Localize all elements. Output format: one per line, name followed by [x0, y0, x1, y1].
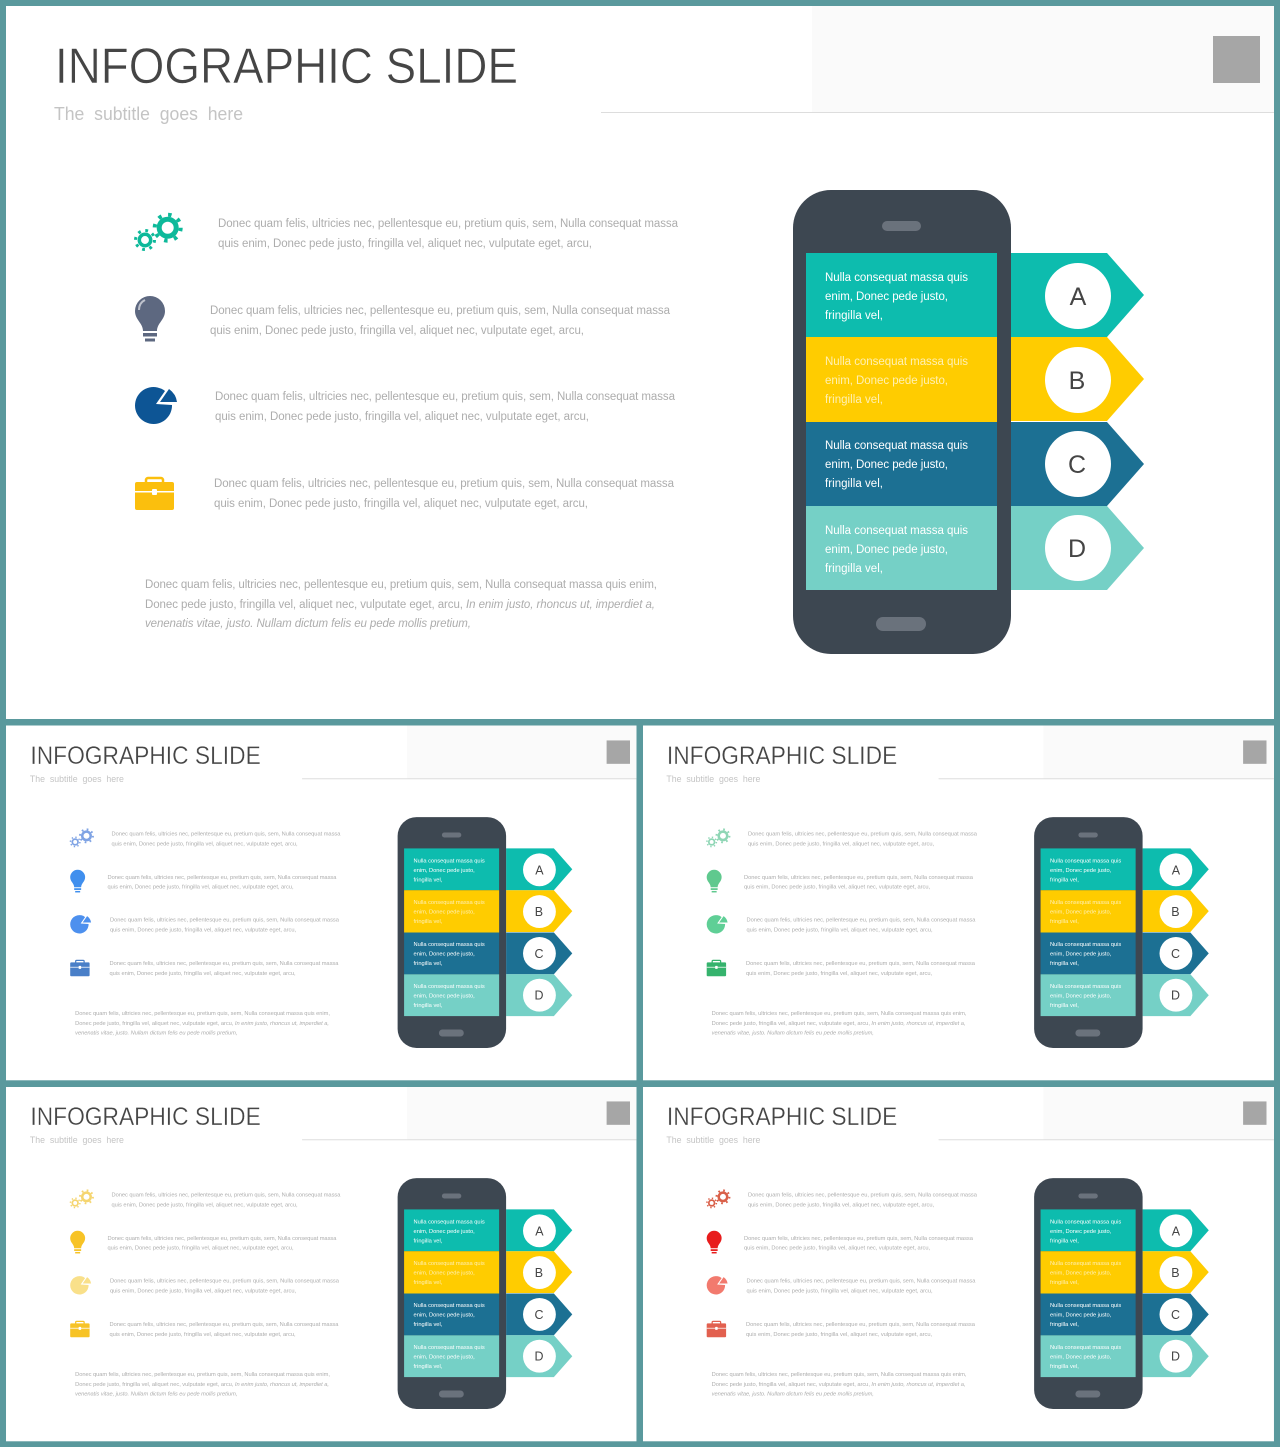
screen block B: fringilla vel,	[414, 919, 443, 925]
arrow tab: B: B	[1069, 367, 1085, 395]
screen block D: enim, Donec pede justo,	[414, 994, 475, 1000]
text: item 3	[747, 918, 976, 934]
arrow tab: C	[1011, 422, 1144, 506]
screen block C	[806, 422, 997, 506]
logo placeholder	[607, 1101, 630, 1125]
screen block C: enim, Donec pede justo,	[1050, 1312, 1112, 1318]
screen block D: Nulla consequat massa quis	[1050, 984, 1121, 990]
screen block A: Nulla consequat massa quis	[1050, 858, 1121, 864]
screen block C: fringilla vel,	[1050, 1322, 1079, 1328]
icon: briefcase	[707, 960, 726, 976]
text: paragraph: Donec pede justo, fringilla vel, aliquet nec, vulputate eget, arcu, In enim justo, rhoncus ut, imperdiet a,	[712, 1021, 965, 1027]
icon: gears	[707, 829, 729, 847]
screen block B: fringilla vel,	[414, 1280, 443, 1286]
screen block D: enim, Donec pede justo,	[414, 1355, 475, 1361]
arrow tab: C	[1143, 933, 1209, 974]
arrow tab: D: D	[534, 1350, 543, 1364]
screen block A: fringilla vel,	[414, 877, 443, 883]
screen block D: enim, Donec pede justo,	[825, 544, 948, 556]
screen block C: Nulla consequat massa quis	[414, 942, 485, 948]
text: item 1: Donec quam felis, ultricies nec, pellentesque eu, pretium quis, sem, Nulla consequat massa	[111, 831, 341, 837]
screen block A: enim, Donec pede justo,	[1050, 1229, 1112, 1235]
arrow tab: D: D	[1171, 989, 1180, 1003]
icon: pie chart	[70, 1276, 91, 1295]
screen block A: Nulla consequat massa quis	[414, 858, 485, 864]
screen block B: Nulla consequat massa quis	[825, 356, 968, 368]
screen block A	[404, 848, 499, 890]
text: item 1: quis enim, Donec pede justo, fringilla vel, aliquet nec, vulputate eget, arcu,	[111, 841, 298, 847]
screen block A: enim, Donec pede justo,	[414, 868, 475, 874]
screen block D: enim, Donec pede justo,	[1050, 1355, 1112, 1361]
screen block D	[1041, 974, 1136, 1016]
text: item 1	[748, 1192, 978, 1208]
icon: briefcase	[135, 478, 174, 510]
icon: light bulb	[707, 870, 722, 892]
screen block C: fringilla vel,	[414, 961, 443, 967]
subtitle: The subtitle goes here	[30, 774, 124, 784]
text: item 3	[110, 1279, 340, 1295]
arrow tab: C: C	[534, 1308, 543, 1322]
text: item 4: quis enim, Donec pede justo, fringilla vel, aliquet nec, vulputate eget, arcu,	[214, 498, 588, 510]
panel: red variant	[643, 1087, 1274, 1441]
logo placeholder	[1243, 740, 1266, 764]
text: paragraph: Donec pede justo, fringilla vel, aliquet nec, vulputate eget, arcu, In enim justo, rhoncus ut, imperdiet a,	[75, 1021, 329, 1027]
text: item 4: quis enim, Donec pede justo, fringilla vel, aliquet nec, vulputate eget, arcu,	[110, 1332, 296, 1338]
title: INFOGRAPHIC SLIDE	[30, 1103, 261, 1131]
text: item 1: Donec quam felis, ultricies nec, pellentesque eu, pretium quis, sem, Nulla consequat massa	[218, 218, 679, 230]
screen block B: Nulla consequat massa quis	[1050, 1261, 1121, 1267]
text: item 2: Donec quam felis, ultricies nec, pellentesque eu, pretium quis, sem, Nulla consequat massa	[744, 875, 974, 881]
screen block D: fringilla vel,	[414, 1364, 443, 1370]
arrow tab: C	[506, 1294, 572, 1335]
subtitle: The subtitle goes here	[666, 1135, 760, 1145]
text: item 2	[744, 875, 974, 891]
screen block B: Nulla consequat massa quis	[414, 1261, 485, 1267]
text: item 1: quis enim, Donec pede justo, fringilla vel, aliquet nec, vulputate eget, arcu,	[748, 841, 935, 847]
arrow tab: A: A	[1070, 283, 1087, 311]
text: item 3: quis enim, Donec pede justo, fringilla vel, aliquet nec, vulputate eget, arcu,	[110, 1289, 297, 1295]
phone	[398, 817, 506, 1048]
text: item 1	[218, 218, 679, 250]
text: item 4: quis enim, Donec pede justo, fringilla vel, aliquet nec, vulputate eget, arcu,	[746, 971, 933, 977]
icon: light bulb	[135, 296, 165, 342]
text: item 4: Donec quam felis, ultricies nec, pellentesque eu, pretium quis, sem, Nulla consequat massa	[110, 961, 339, 967]
text: item 4	[110, 961, 339, 977]
screen block B: fringilla vel,	[1050, 1280, 1079, 1286]
title: INFOGRAPHIC SLIDE	[667, 742, 897, 770]
text: paragraph	[75, 1372, 330, 1398]
screen block C	[404, 933, 499, 974]
text: item 2: Donec quam felis, ultricies nec, pellentesque eu, pretium quis, sem, Nulla consequat massa	[108, 875, 337, 881]
screen block D: fringilla vel,	[1050, 1364, 1079, 1370]
screen block B	[404, 890, 499, 933]
screen block D: Nulla consequat massa quis	[414, 1345, 485, 1351]
screen block A	[404, 1209, 499, 1251]
text: paragraph: Donec quam felis, ultricies nec, pellentesque eu, pretium quis, sem, Nulla consequat massa quis enim,	[712, 1372, 967, 1378]
arrow tab: B: B	[535, 905, 543, 919]
screen block D: Nulla consequat massa quis	[1050, 1345, 1121, 1351]
text: paragraph: Donec pede justo, fringilla vel, aliquet nec, vulputate eget, arcu, In enim justo, rhoncus ut, imperdiet a,	[75, 1382, 329, 1388]
phone	[1034, 817, 1143, 1048]
screen block D: fringilla vel,	[1050, 1003, 1079, 1009]
screen block D: enim, Donec pede justo,	[1050, 994, 1112, 1000]
screen block B: fringilla vel,	[825, 394, 883, 406]
arrow tab: C: C	[1068, 451, 1086, 479]
icon: gears	[70, 829, 93, 847]
text: paragraph: venenatis vitae, justo. Nullam dictum felis eu pede mollis pretium,	[75, 1392, 237, 1398]
text: item 1: quis enim, Donec pede justo, fringilla vel, aliquet nec, vulputate eget, arcu,	[218, 238, 592, 250]
screen block C: fringilla vel,	[414, 1322, 443, 1328]
screen block C: Nulla consequat massa quis	[1050, 942, 1121, 948]
arrow tab: A	[1143, 848, 1209, 890]
arrow tab: B: B	[535, 1266, 543, 1280]
icon: pie chart	[707, 1276, 728, 1295]
text: item 1: quis enim, Donec pede justo, fringilla vel, aliquet nec, vulputate eget, arcu,	[111, 1202, 298, 1208]
arrow tab: D: D	[1068, 535, 1086, 563]
screen block A	[1041, 1209, 1136, 1251]
subtitle: The subtitle goes here	[54, 104, 243, 124]
text: paragraph: venenatis vitae, justo. Nullam dictum felis eu pede mollis pretium,	[712, 1031, 874, 1037]
text: item 3: Donec quam felis, ultricies nec, pellentesque eu, pretium quis, sem, Nulla consequat massa	[747, 1279, 976, 1285]
icon: light bulb	[70, 870, 85, 892]
text: item 3: quis enim, Donec pede justo, fringilla vel, aliquet nec, vulputate eget, arcu,	[747, 928, 933, 934]
screen block A: Nulla consequat massa quis	[414, 1219, 485, 1225]
text: item 2: quis enim, Donec pede justo, fringilla vel, aliquet nec, vulputate eget, arcu,	[108, 885, 294, 891]
logo placeholder	[1243, 1101, 1266, 1125]
screen block D	[404, 1335, 499, 1377]
screen block B	[1041, 1251, 1136, 1294]
arrow tab: D	[1143, 974, 1209, 1016]
panel: main slide	[6, 6, 1274, 719]
arrow tab: C	[506, 933, 572, 974]
icon: briefcase	[70, 960, 90, 976]
text: item 2: Donec quam felis, ultricies nec, pellentesque eu, pretium quis, sem, Nulla consequat massa	[744, 1236, 974, 1242]
screen block A: Nulla consequat massa quis	[825, 272, 968, 284]
arrow tab: B: B	[1171, 905, 1180, 919]
screen block A: fringilla vel,	[1050, 1238, 1079, 1244]
phone	[793, 190, 1011, 654]
arrow tab: D	[1011, 506, 1144, 590]
screen block D: Nulla consequat massa quis	[414, 984, 485, 990]
text: item 4	[214, 478, 675, 510]
text: item 3: Donec quam felis, ultricies nec, pellentesque eu, pretium quis, sem, Nulla consequat massa	[215, 391, 676, 403]
text: paragraph	[712, 1011, 967, 1037]
text: item 4: quis enim, Donec pede justo, fringilla vel, aliquet nec, vulputate eget, arcu,	[746, 1332, 933, 1338]
screen block B	[1041, 890, 1136, 933]
icon: light bulb	[707, 1231, 722, 1253]
logo placeholder	[607, 740, 630, 764]
text: item 2: Donec quam felis, ultricies nec, pellentesque eu, pretium quis, sem, Nulla consequat massa	[108, 1236, 337, 1242]
text: paragraph: Donec pede justo, fringilla vel, aliquet nec, vulputate eget, arcu, In enim justo, rhoncus ut, imperdiet a,	[712, 1382, 965, 1388]
title: INFOGRAPHIC SLIDE	[30, 742, 261, 770]
arrow tab: C: C	[1171, 1308, 1180, 1322]
text: item 4	[746, 1322, 976, 1338]
icon: gears	[136, 215, 181, 250]
subtitle: The subtitle goes here	[30, 1135, 124, 1145]
text: item 2: quis enim, Donec pede justo, fringilla vel, aliquet nec, vulputate eget, arcu,	[744, 1246, 931, 1252]
screen block C: enim, Donec pede justo,	[414, 951, 475, 957]
text: paragraph: venenatis vitae, justo. Nullam dictum felis eu pede mollis pretium,	[75, 1031, 237, 1037]
screen block A: fringilla vel,	[1050, 877, 1079, 883]
screen block B: enim, Donec pede justo,	[825, 375, 948, 387]
text: item 2	[744, 1236, 974, 1252]
text: item 4: Donec quam felis, ultricies nec, pellentesque eu, pretium quis, sem, Nulla consequat massa	[746, 1322, 976, 1328]
screen block C: Nulla consequat massa quis	[825, 440, 968, 452]
screen block B	[404, 1251, 499, 1294]
arrow tab: A	[1143, 1209, 1209, 1251]
text: item 1	[111, 1192, 341, 1208]
icon: pie chart	[707, 915, 728, 934]
arrow tab: A	[506, 1209, 572, 1251]
panel: blue variant	[6, 726, 636, 1080]
screen block D: Nulla consequat massa quis	[825, 525, 968, 537]
text: item 4	[746, 961, 976, 977]
icon: briefcase	[707, 1321, 726, 1337]
arrow tab: B	[1143, 1251, 1209, 1293]
arrow tab: A: A	[535, 1224, 544, 1238]
text: item 2	[108, 875, 337, 891]
arrow tab: A	[506, 848, 572, 890]
icon: pie chart	[135, 387, 177, 424]
screen block B: enim, Donec pede justo,	[1050, 1271, 1112, 1277]
text: item 1	[748, 831, 978, 847]
screen block B: enim, Donec pede justo,	[414, 1271, 475, 1277]
text: item 2	[210, 305, 671, 337]
text: item 3	[747, 1279, 976, 1295]
screen block C: enim, Donec pede justo,	[414, 1312, 475, 1318]
screen block A: Nulla consequat massa quis	[1050, 1219, 1121, 1225]
screen block B: fringilla vel,	[1050, 919, 1079, 925]
arrow tab: B	[506, 1251, 572, 1293]
icon: gears	[707, 1190, 729, 1208]
arrow tab: C: C	[1171, 947, 1180, 961]
icon: briefcase	[70, 1321, 90, 1337]
screen block C	[404, 1294, 499, 1335]
text: item 3: quis enim, Donec pede justo, fringilla vel, aliquet nec, vulputate eget, arcu,	[747, 1289, 933, 1295]
text: item 3: Donec quam felis, ultricies nec, pellentesque eu, pretium quis, sem, Nulla consequat massa	[110, 918, 340, 924]
text: item 2: quis enim, Donec pede justo, fringilla vel, aliquet nec, vulputate eget, arcu,	[210, 325, 584, 337]
icon: pie chart	[70, 915, 91, 934]
screen block A: fringilla vel,	[414, 1238, 443, 1244]
arrow tab: A: A	[1172, 863, 1181, 877]
text: paragraph	[145, 579, 657, 630]
text: paragraph: Donec quam felis, ultricies nec, pellentesque eu, pretium quis, sem, Nulla consequat massa quis enim,	[75, 1011, 330, 1017]
screen block A	[806, 253, 997, 337]
arrow tab: B	[506, 890, 572, 932]
text: paragraph: venenatis vitae, justo. Nullam dictum felis eu pede mollis pretium,	[145, 618, 471, 630]
screen block A	[1041, 848, 1136, 890]
title: INFOGRAPHIC SLIDE	[667, 1103, 897, 1131]
text: item 4: quis enim, Donec pede justo, fringilla vel, aliquet nec, vulputate eget, arcu,	[110, 971, 296, 977]
panel: yellow variant	[6, 1087, 636, 1441]
screen block A: fringilla vel,	[825, 310, 883, 322]
screen block C: enim, Donec pede justo,	[825, 459, 948, 471]
screen block C	[1041, 933, 1136, 974]
arrow tab: D: D	[1171, 1350, 1180, 1364]
text: item 4: Donec quam felis, ultricies nec, pellentesque eu, pretium quis, sem, Nulla consequat massa	[110, 1322, 339, 1328]
phone	[398, 1178, 506, 1409]
screen block B: enim, Donec pede justo,	[414, 910, 475, 916]
text: item 3	[110, 918, 340, 934]
screen block D	[806, 506, 997, 590]
text: item 3: quis enim, Donec pede justo, fringilla vel, aliquet nec, vulputate eget, arcu,	[110, 928, 297, 934]
arrow tab: B	[1143, 890, 1209, 932]
arrow tab: D	[506, 1335, 572, 1377]
text: paragraph	[75, 1011, 330, 1037]
icon: gears	[70, 1190, 93, 1208]
subtitle: The subtitle goes here	[666, 774, 760, 784]
screen block C: Nulla consequat massa quis	[414, 1303, 485, 1309]
text: paragraph: Donec quam felis, ultricies nec, pellentesque eu, pretium quis, sem, Nulla consequat massa quis enim,	[145, 579, 657, 591]
phone	[1034, 1178, 1143, 1409]
title: INFOGRAPHIC SLIDE	[55, 38, 518, 94]
logo placeholder	[1213, 36, 1260, 83]
screen block B: enim, Donec pede justo,	[1050, 910, 1112, 916]
text: paragraph: venenatis vitae, justo. Nullam dictum felis eu pede mollis pretium,	[712, 1392, 874, 1398]
arrow tab: D	[1143, 1335, 1209, 1377]
text: item 1: quis enim, Donec pede justo, fringilla vel, aliquet nec, vulputate eget, arcu,	[748, 1202, 935, 1208]
text: item 3	[215, 391, 676, 423]
text: paragraph: Donec quam felis, ultricies nec, pellentesque eu, pretium quis, sem, Nulla consequat massa quis enim,	[712, 1011, 967, 1017]
text: item 2	[108, 1236, 337, 1252]
text: item 2: quis enim, Donec pede justo, fringilla vel, aliquet nec, vulputate eget, arcu,	[108, 1246, 294, 1252]
text: paragraph: Donec quam felis, ultricies nec, pellentesque eu, pretium quis, sem, Nulla consequat massa quis enim,	[75, 1372, 330, 1378]
arrow tab: C: C	[534, 947, 543, 961]
screen block B: Nulla consequat massa quis	[1050, 900, 1121, 906]
text: item 3: Donec quam felis, ultricies nec, pellentesque eu, pretium quis, sem, Nulla consequat massa	[747, 918, 976, 924]
icon: light bulb	[70, 1231, 85, 1253]
text: paragraph: Donec pede justo, fringilla vel, aliquet nec, vulputate eget, arcu, In enim justo, rhoncus ut, imperdiet a,	[145, 599, 655, 611]
panel: green variant	[643, 726, 1274, 1080]
text: item 3: quis enim, Donec pede justo, fringilla vel, aliquet nec, vulputate eget, arcu,	[215, 411, 589, 423]
text: item 4: Donec quam felis, ultricies nec, pellentesque eu, pretium quis, sem, Nulla consequat massa	[746, 961, 976, 967]
screen block C: fringilla vel,	[1050, 961, 1079, 967]
screen block C: Nulla consequat massa quis	[1050, 1303, 1121, 1309]
arrow tab: D: D	[534, 989, 543, 1003]
screen block D: fringilla vel,	[825, 563, 883, 575]
text: item 4	[110, 1322, 339, 1338]
screen block A: enim, Donec pede justo,	[414, 1229, 475, 1235]
screen block D	[404, 974, 499, 1016]
text: item 3: Donec quam felis, ultricies nec, pellentesque eu, pretium quis, sem, Nulla consequat massa	[110, 1279, 340, 1285]
text: item 1: Donec quam felis, ultricies nec, pellentesque eu, pretium quis, sem, Nulla consequat massa	[748, 831, 978, 837]
screen block C: enim, Donec pede justo,	[1050, 951, 1112, 957]
arrow tab: B	[1011, 337, 1144, 421]
screen block B: Nulla consequat massa quis	[414, 900, 485, 906]
screen block B	[806, 337, 997, 422]
text: paragraph	[712, 1372, 967, 1398]
arrow tab: A: A	[1172, 1224, 1181, 1238]
screen block D	[1041, 1335, 1136, 1377]
text: item 2: quis enim, Donec pede justo, fringilla vel, aliquet nec, vulputate eget, arcu,	[744, 885, 931, 891]
arrow tab: A	[1011, 253, 1144, 337]
text: item 1: Donec quam felis, ultricies nec, pellentesque eu, pretium quis, sem, Nulla consequat massa	[748, 1192, 978, 1198]
screen block C	[1041, 1294, 1136, 1335]
screen block D: fringilla vel,	[414, 1003, 443, 1009]
screen block A: enim, Donec pede justo,	[1050, 868, 1112, 874]
arrow tab: A: A	[535, 863, 544, 877]
text: item 1	[111, 831, 341, 847]
screen block C: fringilla vel,	[825, 478, 883, 490]
arrow tab: B: B	[1171, 1266, 1180, 1280]
text: item 1: Donec quam felis, ultricies nec, pellentesque eu, pretium quis, sem, Nulla consequat massa	[111, 1192, 341, 1198]
screen block A: enim, Donec pede justo,	[825, 291, 948, 303]
text: item 4: Donec quam felis, ultricies nec, pellentesque eu, pretium quis, sem, Nulla consequat massa	[214, 478, 675, 490]
arrow tab: D	[506, 974, 572, 1016]
arrow tab: C	[1143, 1294, 1209, 1335]
text: item 2: Donec quam felis, ultricies nec, pellentesque eu, pretium quis, sem, Nulla consequat massa	[210, 305, 671, 317]
